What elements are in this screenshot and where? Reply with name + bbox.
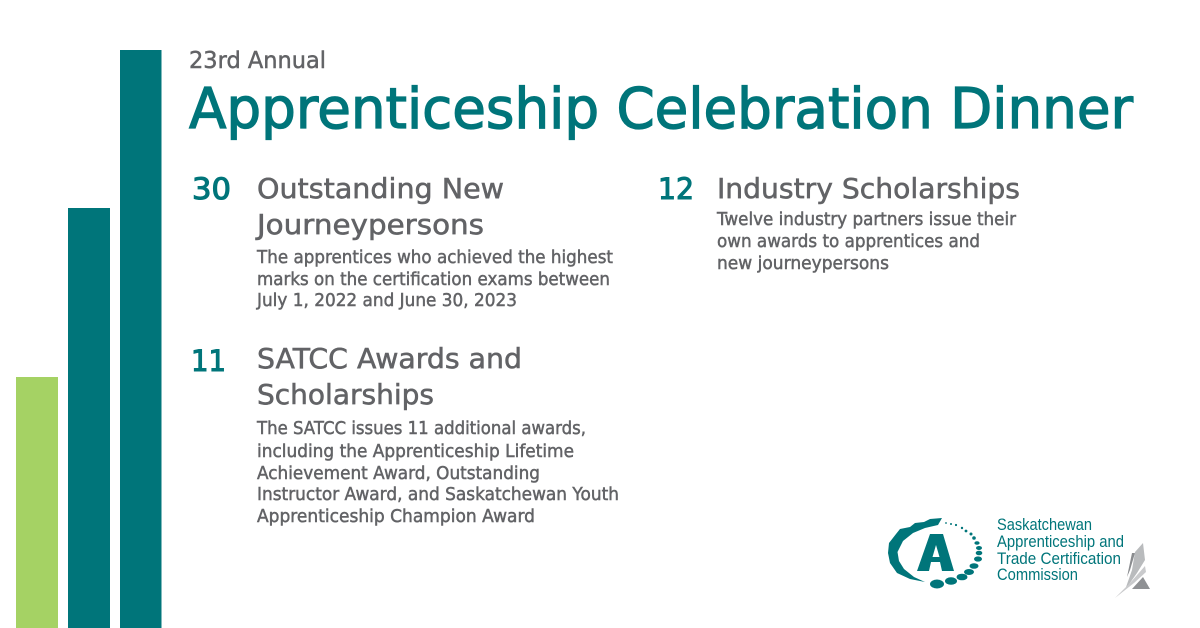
section: 30 outstanding new journeypersons xyxy=(192,172,613,311)
description xyxy=(716,209,1017,274)
section: 11 SATCC awards and scholarships xyxy=(191,343,619,527)
number 12: 12 xyxy=(658,172,694,206)
description xyxy=(256,418,619,527)
logo wordmark: Commission xyxy=(997,566,1078,584)
section: 12 industry scholarships xyxy=(658,172,1020,274)
description: Instructor Award, and Saskatchewan Youth xyxy=(257,484,619,505)
heading xyxy=(257,343,522,411)
description: July 1, 2022 and June 30, 2023 xyxy=(256,290,517,311)
logo wordmark: Saskatchewan xyxy=(997,516,1092,534)
logo wordmark: Trade Certification xyxy=(997,550,1121,568)
heading xyxy=(255,173,504,241)
icon: grey sail mark xyxy=(1115,543,1150,598)
heading: Industry Scholarships xyxy=(717,173,1020,205)
description: Apprenticeship Champion Award xyxy=(257,506,535,527)
description: marks on the certification exams between xyxy=(257,269,610,290)
heading: Scholarships xyxy=(257,379,434,411)
description: The SATCC issues 11 additional awards, xyxy=(256,418,586,439)
number 11: 11 xyxy=(191,344,226,378)
icon: A emblem xyxy=(888,518,982,588)
logo wordmark: Apprenticeship and xyxy=(997,533,1124,551)
title: Apprenticeship Celebration Dinner xyxy=(189,77,1134,142)
number 30: 30 xyxy=(192,172,231,206)
logo xyxy=(888,516,1150,598)
heading: SATCC Awards and xyxy=(257,343,522,375)
description: new journeypersons xyxy=(717,253,889,274)
description: own awards to apprentices and xyxy=(717,231,980,252)
bar chart decoration xyxy=(16,50,162,628)
heading: Journeypersons xyxy=(255,209,484,241)
subtitle: 23rd Annual xyxy=(189,46,326,74)
logo wordmark xyxy=(997,516,1124,584)
description: The apprentices who achieved the highest xyxy=(256,247,613,268)
description: Achievement Award, Outstanding xyxy=(257,463,540,484)
heading: Outstanding New xyxy=(257,173,504,205)
description xyxy=(256,247,613,311)
description: including the Apprenticeship Lifetime xyxy=(257,441,574,462)
description: Twelve industry partners issue their xyxy=(716,209,1017,230)
